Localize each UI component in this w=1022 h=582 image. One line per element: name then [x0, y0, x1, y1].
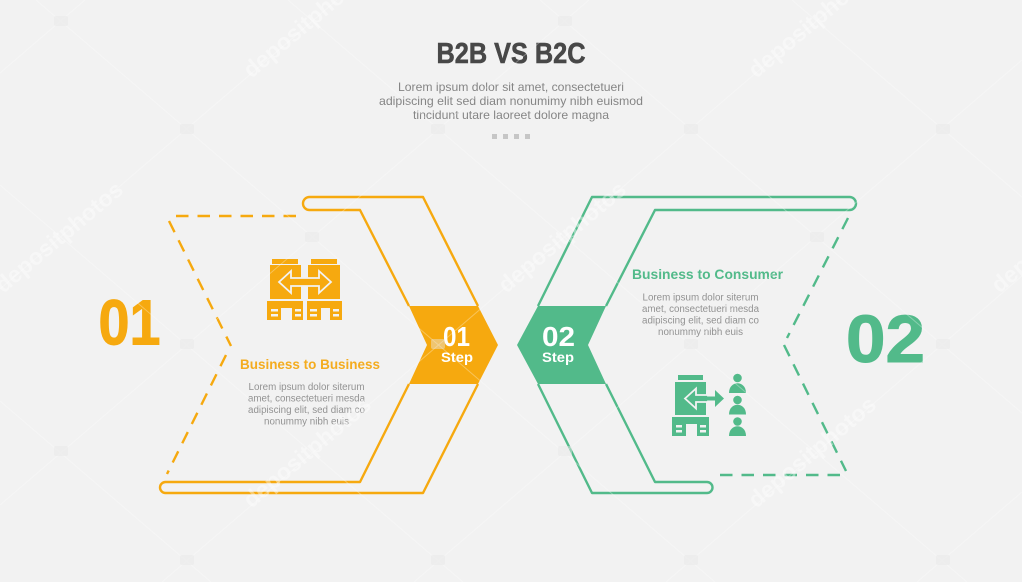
intro text block: adipiscing elit sed diam nonumimy nibh euismod — [379, 94, 643, 108]
panel: business to business — [98, 197, 498, 493]
solid arrow outline right — [538, 197, 856, 493]
body text right: adipiscing elit, sed diam co — [642, 316, 759, 326]
dashed chevron outline right — [719, 218, 848, 475]
body text left: nonummy nibh euis — [264, 416, 349, 428]
heading: business to consumer: Business to Consumer — [632, 266, 784, 282]
heading: business to business: Business to Business — [240, 356, 380, 372]
body text left — [248, 382, 365, 428]
step badge 02 — [517, 306, 606, 384]
step badge 02: Step — [542, 349, 574, 365]
body text right: amet, consectetueri mesda — [642, 304, 759, 315]
watermark pattern: depositphotos — [743, 391, 881, 513]
dashed chevron outline left — [167, 216, 296, 474]
icon: business to consumers — [672, 374, 746, 436]
panel: business to consumer — [517, 197, 925, 493]
step badge 01 — [409, 306, 498, 384]
watermark pattern: depositphotos — [493, 176, 631, 298]
body text right: nonummy nibh euis — [658, 327, 743, 338]
body text left: Lorem ipsum dolor siterum — [248, 382, 364, 393]
body text right — [642, 292, 759, 338]
body text left: adipiscing elit, sed diam co — [248, 405, 365, 416]
solid arrow outline left — [160, 197, 478, 493]
intro text block: tincidunt utare laoreet dolore magna — [413, 108, 609, 122]
step badge 01: 01 — [443, 321, 470, 352]
body text left: amet, consectetueri mesda — [248, 394, 365, 404]
big number 01: 01 — [98, 286, 160, 358]
intro text block: Lorem ipsum dolor sit amet, consectetueri — [398, 80, 624, 94]
body text right: Lorem ipsum dolor siterum — [642, 292, 758, 304]
step badge 02: 02 — [542, 321, 575, 352]
big number 02: 02 — [846, 302, 925, 377]
watermark pattern: depositphotos — [238, 391, 376, 513]
pagination dots — [492, 134, 530, 139]
icon: pallets exchange — [267, 259, 342, 320]
intro text block — [379, 80, 643, 122]
title: B2B VS B2C — [436, 38, 586, 70]
step badge 01: Step — [441, 349, 473, 365]
